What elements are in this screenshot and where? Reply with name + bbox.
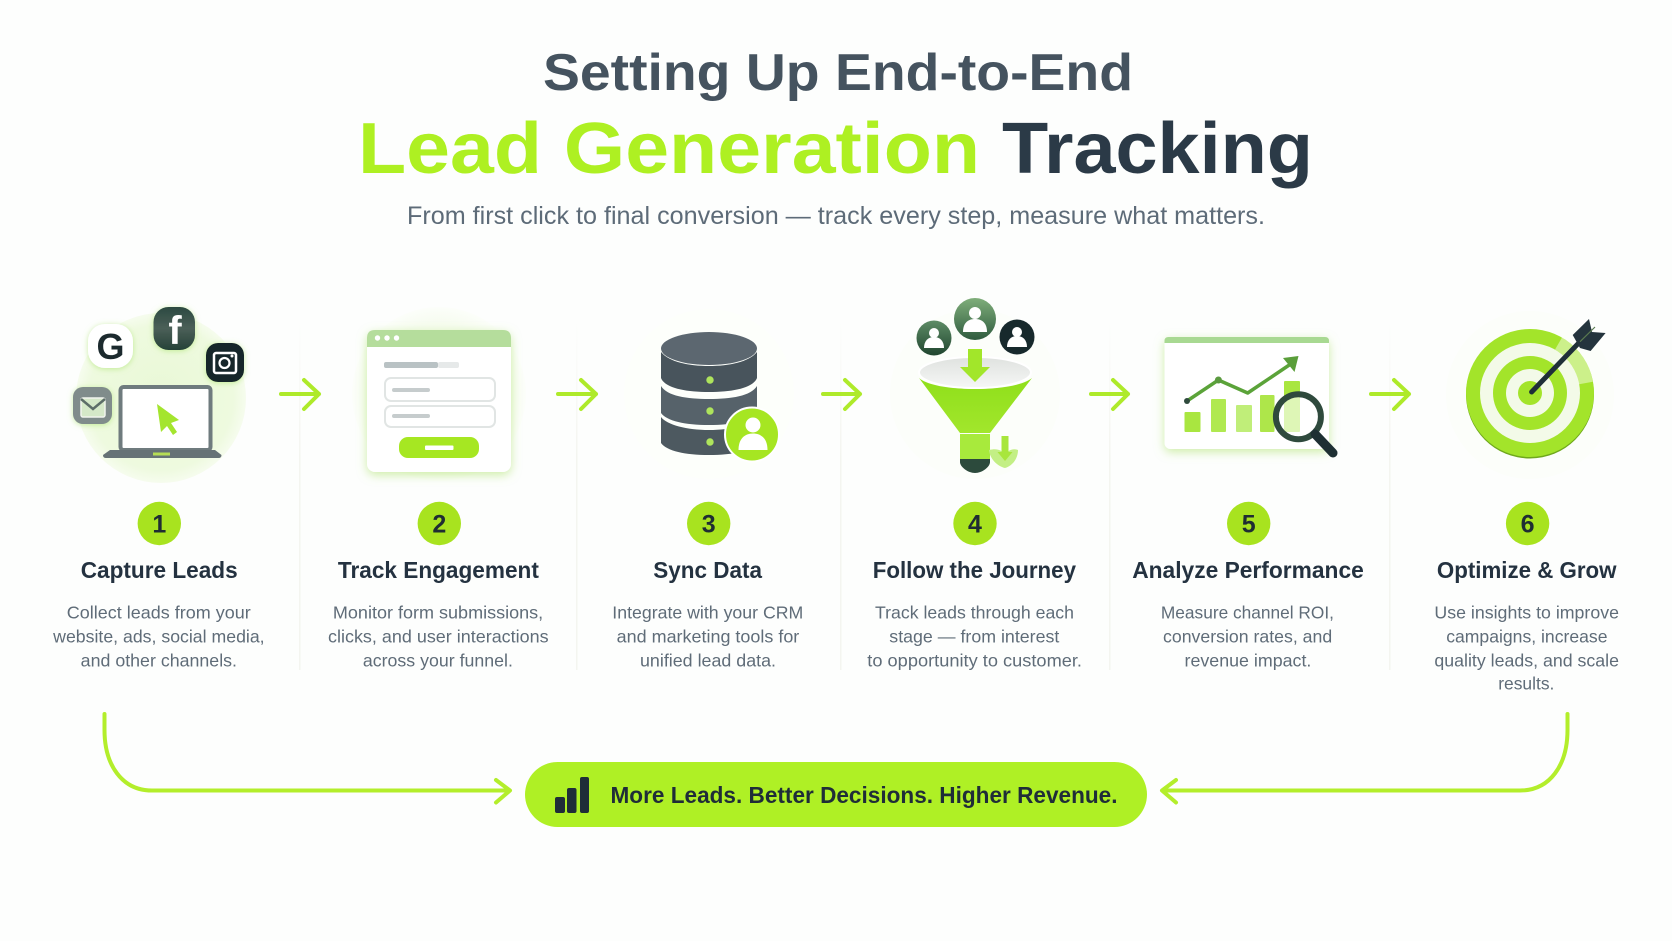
title line 2: tracking: Tracking bbox=[1002, 109, 1313, 189]
panel: step 2 track engagement bbox=[328, 307, 549, 671]
description 6: quality leads, and scale bbox=[1434, 651, 1619, 671]
arrow: left loop into banner bbox=[104, 714, 510, 802]
description 1: Collect leads from your bbox=[67, 602, 251, 622]
panel: step 5 analyze performance bbox=[1132, 337, 1364, 671]
description 5: Measure channel ROI, bbox=[1161, 602, 1334, 622]
description 5: conversion rates, and bbox=[1163, 626, 1332, 646]
heading: sync data: Sync Data bbox=[653, 557, 762, 583]
description 3: and marketing tools for bbox=[617, 626, 799, 646]
description 5 bbox=[1161, 602, 1334, 671]
description 6: Use insights to improve bbox=[1434, 602, 1619, 622]
icon: target with dart bbox=[1446, 311, 1614, 479]
panel: step 4 follow the journey bbox=[867, 298, 1082, 671]
description 3 bbox=[612, 602, 803, 671]
arrow 2 to 3 bbox=[558, 380, 596, 409]
description 4: Track leads through each bbox=[875, 602, 1074, 622]
arrow 5 to 6 bbox=[1371, 380, 1409, 409]
banner text: More Leads. Better Decisions. Higher Revenue. bbox=[610, 782, 1118, 808]
icon: bar chart bbox=[555, 777, 589, 813]
description 4: to opportunity to customer. bbox=[867, 651, 1082, 671]
icon: laptop with social channels bbox=[73, 307, 246, 483]
heading: optimize and grow: Optimize & Grow bbox=[1437, 557, 1617, 583]
description 4: stage — from interest bbox=[889, 626, 1059, 646]
number badge 6: 6 bbox=[1521, 510, 1535, 538]
description 2: across your funnel. bbox=[363, 651, 513, 671]
description 6: campaigns, increase bbox=[1446, 626, 1608, 646]
description 2: Monitor form submissions, bbox=[333, 602, 543, 622]
description 2: clicks, and user interactions bbox=[328, 626, 549, 646]
heading: analyze performance: Analyze Performance bbox=[1132, 557, 1364, 583]
number badge 4: 4 bbox=[968, 510, 982, 538]
panel: step 1 capture leads bbox=[52, 307, 265, 671]
description 1: and other channels. bbox=[81, 651, 237, 671]
number badge 2 bbox=[418, 502, 461, 545]
number badge 3 bbox=[687, 502, 730, 545]
number badge 1: 1 bbox=[152, 510, 166, 538]
description 2 bbox=[328, 602, 549, 671]
number badge 6 bbox=[1506, 502, 1549, 545]
description 6 bbox=[1434, 602, 1619, 693]
description 3: unified lead data. bbox=[640, 651, 776, 671]
arrow 3 to 4 bbox=[823, 380, 860, 409]
number badge 1 bbox=[138, 502, 181, 545]
number badge 4 bbox=[953, 502, 997, 545]
number badge 5: 5 bbox=[1242, 510, 1256, 538]
number badge 3: 3 bbox=[702, 510, 716, 538]
icon: web form bbox=[352, 307, 526, 481]
number badge 5 bbox=[1227, 502, 1270, 545]
title bbox=[358, 44, 1313, 189]
heading: follow the journey: Follow the Journey bbox=[873, 557, 1076, 583]
arrow 4 to 5 bbox=[1091, 380, 1128, 409]
panel: step 6 optimize and grow bbox=[1434, 311, 1619, 693]
description 3: Integrate with your CRM bbox=[612, 602, 803, 622]
description 1 bbox=[52, 602, 265, 671]
description 6: results. bbox=[1498, 673, 1554, 693]
icon: laptop with social channels: f bbox=[168, 309, 182, 353]
heading: track engagement: Track Engagement bbox=[338, 557, 539, 583]
panel: step 3 sync data bbox=[612, 309, 803, 671]
number badge 2: 2 bbox=[432, 510, 446, 538]
subtitle: From first click to final conversion — track every step, measure what matters. bbox=[407, 202, 1265, 230]
icon: funnel with people bbox=[890, 298, 1060, 479]
arrow: right loop into banner bbox=[1162, 714, 1568, 802]
icon: laptop with social channels: G bbox=[96, 326, 125, 367]
title line 1: Setting Up End-to-End bbox=[543, 44, 1133, 102]
icon: dashboard chart with magnifier bbox=[1164, 337, 1333, 453]
icon: database with user badge bbox=[624, 309, 794, 479]
heading: capture leads: Capture Leads bbox=[81, 557, 238, 583]
description 5: revenue impact. bbox=[1184, 651, 1311, 671]
description 1: website, ads, social media, bbox=[52, 626, 265, 646]
title line 2: lead generation: Lead Generation bbox=[358, 109, 980, 189]
arrow 1 to 2 bbox=[281, 380, 319, 409]
banner: more leads bbox=[525, 762, 1147, 827]
description 4 bbox=[867, 602, 1082, 671]
